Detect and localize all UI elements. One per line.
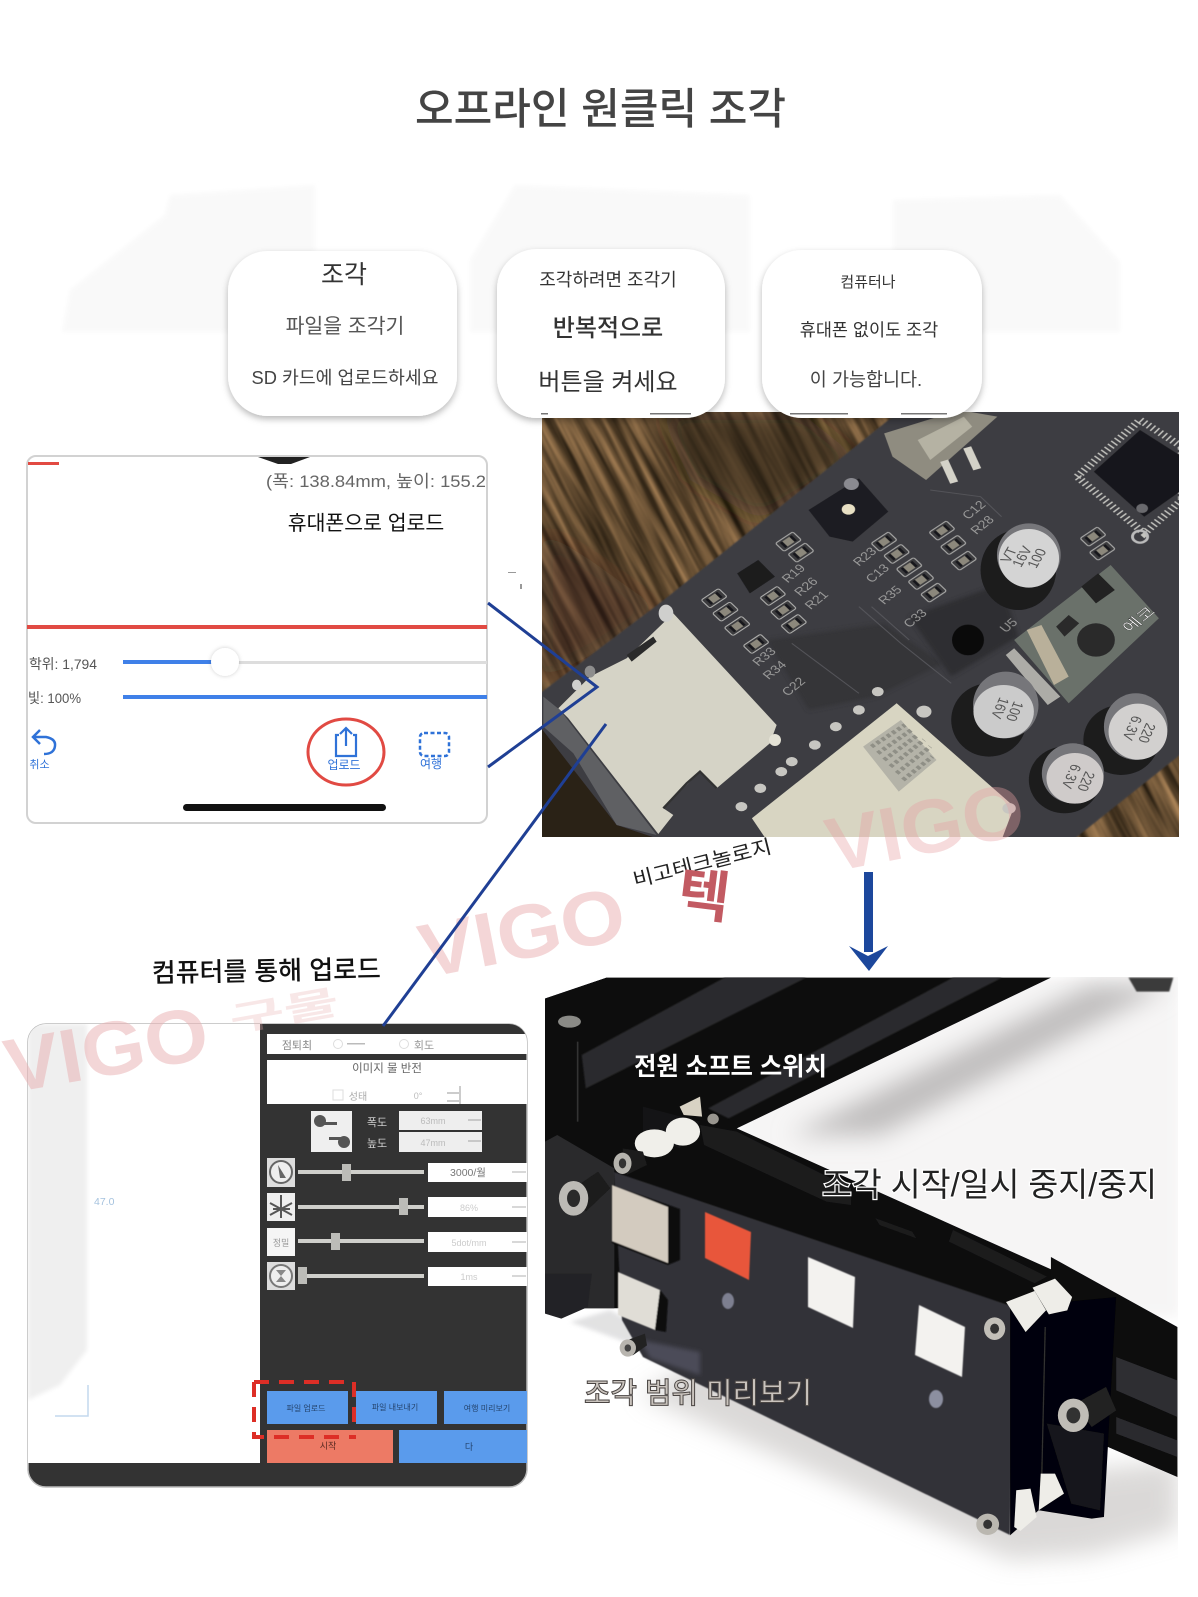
silkscreen labels: C12 [959,498,989,522]
icon: travel frame [420,733,449,771]
invert row: 0° [414,1091,423,1101]
size inputs: 폭도 [367,1116,387,1129]
silkscreen labels: R28 [967,513,997,537]
watermark: VIGO lower: 구물 [227,983,342,1040]
watermark: VIGO lower: VIGO [0,990,215,1110]
capacitor labels: 220 [1074,770,1098,793]
invert row: 성태 [349,1091,367,1103]
capacitors [951,523,1168,813]
upload by phone caption: 휴대폰으로 업로드 [288,512,444,535]
dimension text 47.0: 47.0 [94,1196,115,1208]
front panel [614,1172,1014,1535]
watermark: VIGO lower [0,983,342,1110]
home bar [183,804,386,811]
capacitor labels: 16V [987,696,1012,721]
connector lines [383,603,606,1026]
dark top bar [260,1024,530,1034]
slider rows: 5dot/mm [451,1238,487,1248]
label: start / pause / stop: 조각 시작/일시 중지/중지 [822,1166,1157,1203]
action buttons: 파일 업로드 [286,1404,326,1413]
logo character: 텍 [675,861,733,930]
capacitor labels: 100 [1002,700,1027,723]
size inputs: 63mm [420,1116,446,1126]
watermark: VIGO upper: VIGO [412,872,632,995]
card: no computer: 휴대폰 없이도 조각 [800,320,938,340]
silkscreen labels: R26 [791,574,821,599]
power module [1006,565,1159,705]
caption: upload by computer: 컴퓨터를 통해 업로드 [152,954,381,988]
caption: company name: 비고테크놀로지 [631,835,774,892]
silkscreen labels: C33 [900,606,930,630]
size inputs [367,1111,482,1152]
small red line [28,462,59,465]
action buttons: 파일 내보내기 [372,1403,418,1412]
microchip [1077,420,1182,543]
panel: phone upload screenshot [27,456,487,823]
screws upper [559,1148,647,1216]
silkscreen labels: C22 [778,674,808,699]
rollers [1006,1279,1072,1531]
action buttons: 여행 미리보기 [464,1403,510,1413]
panel: engraver control panel photo [545,977,1180,1597]
wood background [542,412,1179,837]
icon: upload in red circle: 업로드 [327,758,361,772]
small stray marks [508,572,522,589]
mode row [267,1034,529,1054]
mode row: 점퇴최 [282,1039,312,1052]
capacitor labels: 16V [1009,543,1036,569]
card: no computer: 이 가능합니다. [810,369,922,390]
top rollers [635,1097,719,1157]
title: 오프라인 원클릭 조각 [415,86,786,134]
silkscreen labels: R35 [875,583,905,607]
capacitor labels [987,543,1159,793]
silkscreen labels: R19 [778,561,808,585]
card: engrave file: 조각 [321,261,367,289]
corner marker [55,1385,88,1416]
label: preview range: 조각 범위 미리보기 [584,1377,812,1410]
slider: resolution: 학위: 1,794 [29,656,97,672]
top connector [884,410,997,484]
mounting hole [952,625,984,655]
card: engrave file: SD 카드에 업로드하세요 [252,368,438,388]
slider rows: 정밀 [273,1237,289,1248]
canvas area [28,1024,260,1463]
silkscreen labels [749,498,1021,699]
watermark on photo: VIGO [819,767,1032,889]
slider rows: 1ms [460,1272,478,1282]
panel: circuit board photo [230,0,1198,1324]
silkscreen labels: R23 [849,544,880,569]
card: no computer: 컴퓨터나 [840,274,896,291]
red dashed highlight [254,1382,356,1437]
invert row: 이미지 물 반전 [352,1062,422,1075]
card: engrave file [228,251,457,416]
board components [701,521,1115,654]
capacitor labels: 220 [1135,721,1159,745]
icon: cancel: 취소 [29,758,50,771]
rear plates [620,1279,1116,1535]
size text: (폭: 138.84mm, 높이: 155.2 [266,472,486,491]
black frame and rails [545,978,1173,1308]
silkscreen labels: C13 [862,561,892,585]
wifi module [736,687,1016,840]
capacitor labels: VT [997,545,1021,565]
slider: light [28,690,487,706]
slider rows [267,1158,528,1290]
slider: light: 빛: 100% [28,690,81,706]
card: no computer [762,250,982,418]
card: press button [497,249,725,418]
SD card and slot [540,605,781,838]
red line [27,625,487,629]
rail stripes [582,978,1002,1118]
table tones [740,977,1180,1317]
icon: hands [311,1111,352,1152]
circuit board [540,410,1182,840]
capacitor labels: 6.3V [1058,762,1084,791]
label: 에코: 에코 [1119,604,1159,636]
action buttons: 시작 [320,1441,336,1451]
card: press button: 버튼을 켜세요 [538,369,678,396]
arrow [849,872,888,971]
silkscreen labels: R21 [801,588,831,612]
size inputs: 47mm [420,1138,446,1148]
capacitor labels: 6.3V [1119,714,1145,743]
icon: travel frame: 여행 [420,756,442,771]
capacitor labels: 100 [1024,546,1050,570]
silkscreen labels: R34 [759,658,790,682]
label: power soft switch: 전원 소프트 스위치 [634,1053,827,1081]
slider: resolution [29,648,487,676]
front rail plates [700,1125,1047,1283]
card: press button: 반복적으로 [553,315,663,342]
icon: cancel [29,730,55,771]
buzzer [809,478,888,542]
lower rail [545,1257,1177,1477]
mode row: 회도 [414,1039,434,1052]
card: press button: 조각하려면 조각기 [539,270,677,290]
panel buttons [612,1185,965,1408]
action buttons: 다 [465,1442,474,1452]
slider rows: 86% [460,1203,478,1213]
silkscreen labels: R33 [749,644,779,669]
panel: PC software screenshot [28,1024,530,1487]
soft shadow beneath panel [640,1360,1178,1560]
card: engrave file: 파일을 조각기 [286,315,404,338]
faint background blotches [62,185,1120,332]
silkscreen labels: U5 [996,616,1021,635]
action buttons [267,1391,528,1463]
board traces [792,490,1002,693]
icon: upload in red circle [308,719,384,785]
left frame edge [576,1042,578,1122]
grey left strip [28,1024,87,1400]
invert row [267,1060,529,1104]
size inputs: 높도 [367,1137,387,1150]
screws [984,1317,1005,1340]
left block [545,1135,614,1308]
slider rows: 3000/월 [450,1167,486,1179]
notch [258,457,310,464]
